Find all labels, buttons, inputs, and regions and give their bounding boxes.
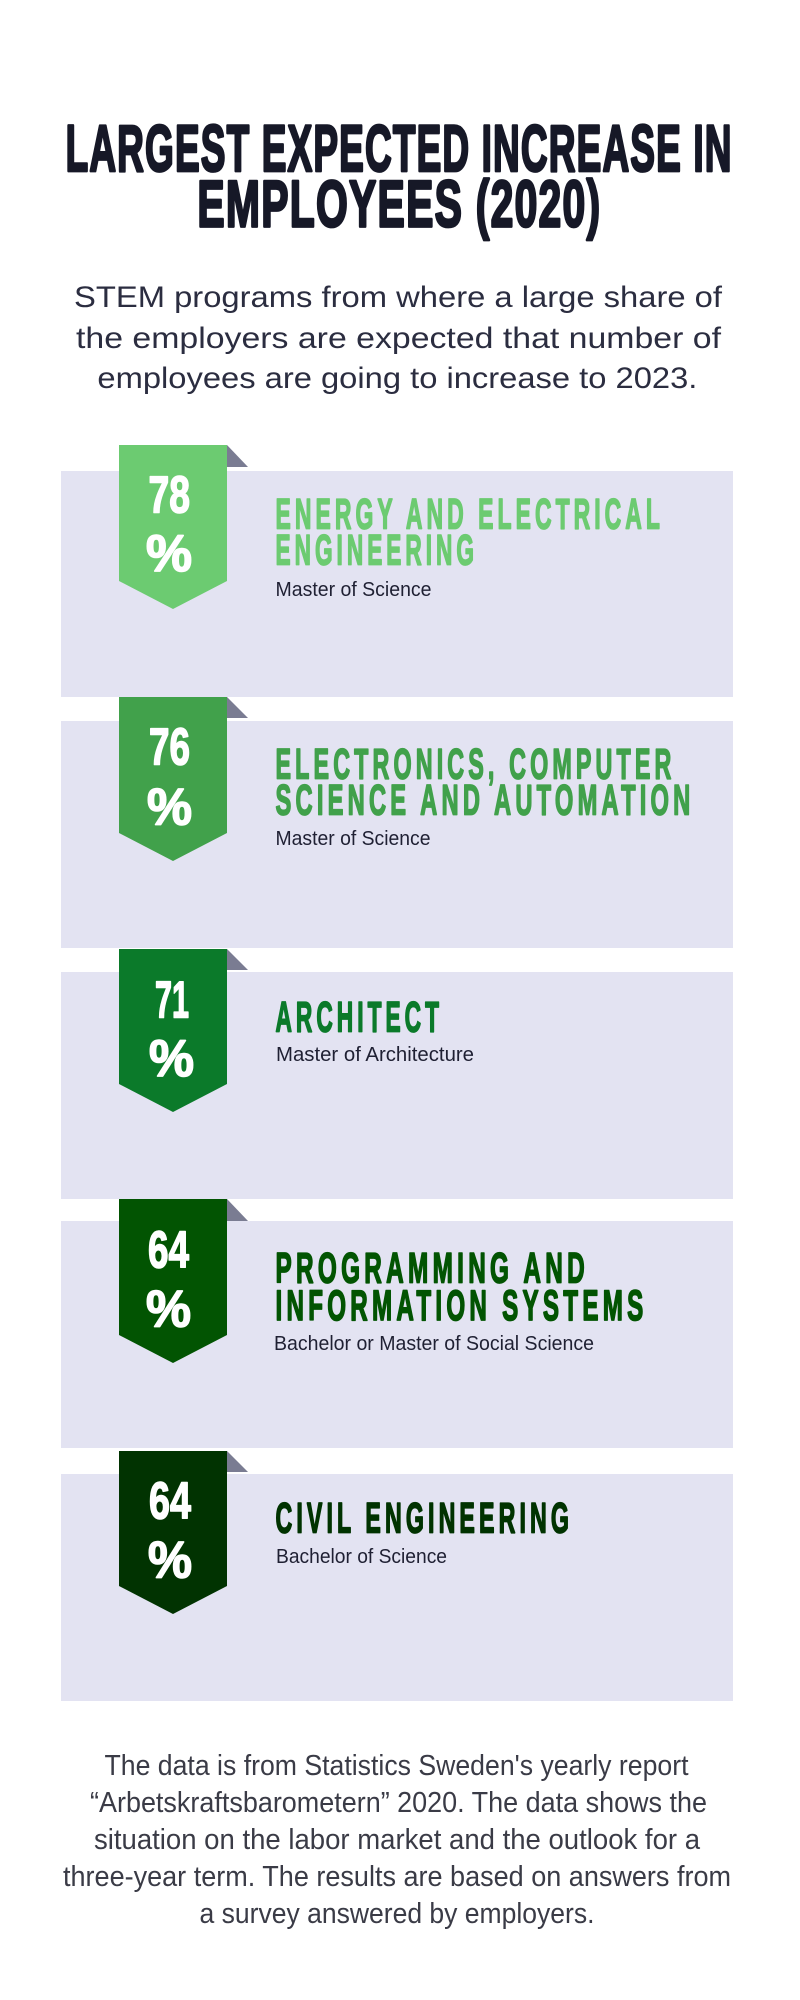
ribbon fold [227, 445, 248, 467]
intro text [74, 281, 723, 395]
degree label: Master of Science [276, 578, 432, 601]
ribbon badge: 64 %: 64 [148, 1222, 189, 1280]
ribbon fold [227, 697, 248, 718]
panel background [61, 1474, 733, 1701]
intro text: employees are going to increase to 2023. [97, 362, 697, 395]
intro text: the employers are expected that number of [76, 322, 722, 355]
heading: ENGINEERING [276, 528, 478, 574]
footer source note [63, 1750, 731, 1930]
ribbon fold [227, 1199, 248, 1221]
ribbon badge: 76 %: 76 [149, 718, 190, 776]
heading: ARCHITECT [276, 994, 443, 1042]
ribbon badge: 71 %: 71 [155, 972, 189, 1030]
panel background [61, 972, 733, 1199]
panel: electronics, computer science and automation [61, 697, 733, 948]
ribbon badge: 64 %: % [146, 1280, 191, 1338]
degree label: Master of Architecture [276, 1043, 474, 1066]
title [66, 111, 733, 240]
ribbon badge: 71 % [119, 949, 227, 1112]
panel: architect [61, 949, 733, 1199]
ribbon badge: 64 %: 64 [149, 1472, 191, 1530]
ribbon badge: 64 % [119, 1451, 227, 1614]
ribbon fold [227, 949, 248, 970]
ribbon badge: 78 %: 78 [148, 466, 190, 524]
panel background [61, 1221, 733, 1448]
degree label: Bachelor of Science [276, 1545, 447, 1568]
ribbon badge: 71 %: % [149, 1030, 194, 1088]
panel background [61, 721, 733, 948]
ribbon badge: 64 % [119, 1199, 227, 1363]
degree label: Master of Science [276, 827, 430, 850]
footer source note: “Arbetskraftsbarometern” 2020. The data shows the [90, 1787, 707, 1819]
ribbon fold [227, 1451, 248, 1472]
panel: civil engineering [61, 1451, 733, 1701]
heading [276, 1246, 648, 1330]
panel: energy and electrical engineering [61, 445, 733, 697]
heading [276, 492, 664, 574]
ribbon badge: 76 %: % [147, 778, 192, 836]
ribbon badge: 78 % [119, 445, 227, 609]
heading [276, 742, 694, 824]
footer source note: The data is from Statistics Sweden's yearly report [104, 1750, 689, 1782]
footer source note: a survey answered by employers. [200, 1898, 594, 1930]
panel background [61, 471, 733, 697]
ribbon badge: 78 %: % [146, 525, 192, 583]
ribbon badge: 64 %: % [148, 1532, 192, 1590]
footer source note: situation on the labor market and the outlook for a [94, 1824, 700, 1856]
panel: programming and information systems [61, 1199, 733, 1448]
footer source note: three-year term. The results are based on answers from [63, 1861, 731, 1893]
ribbon badge: 76 % [119, 697, 227, 861]
degree label: Bachelor or Master of Social Science [274, 1332, 594, 1355]
intro text: STEM programs from where a large share of [74, 281, 723, 314]
